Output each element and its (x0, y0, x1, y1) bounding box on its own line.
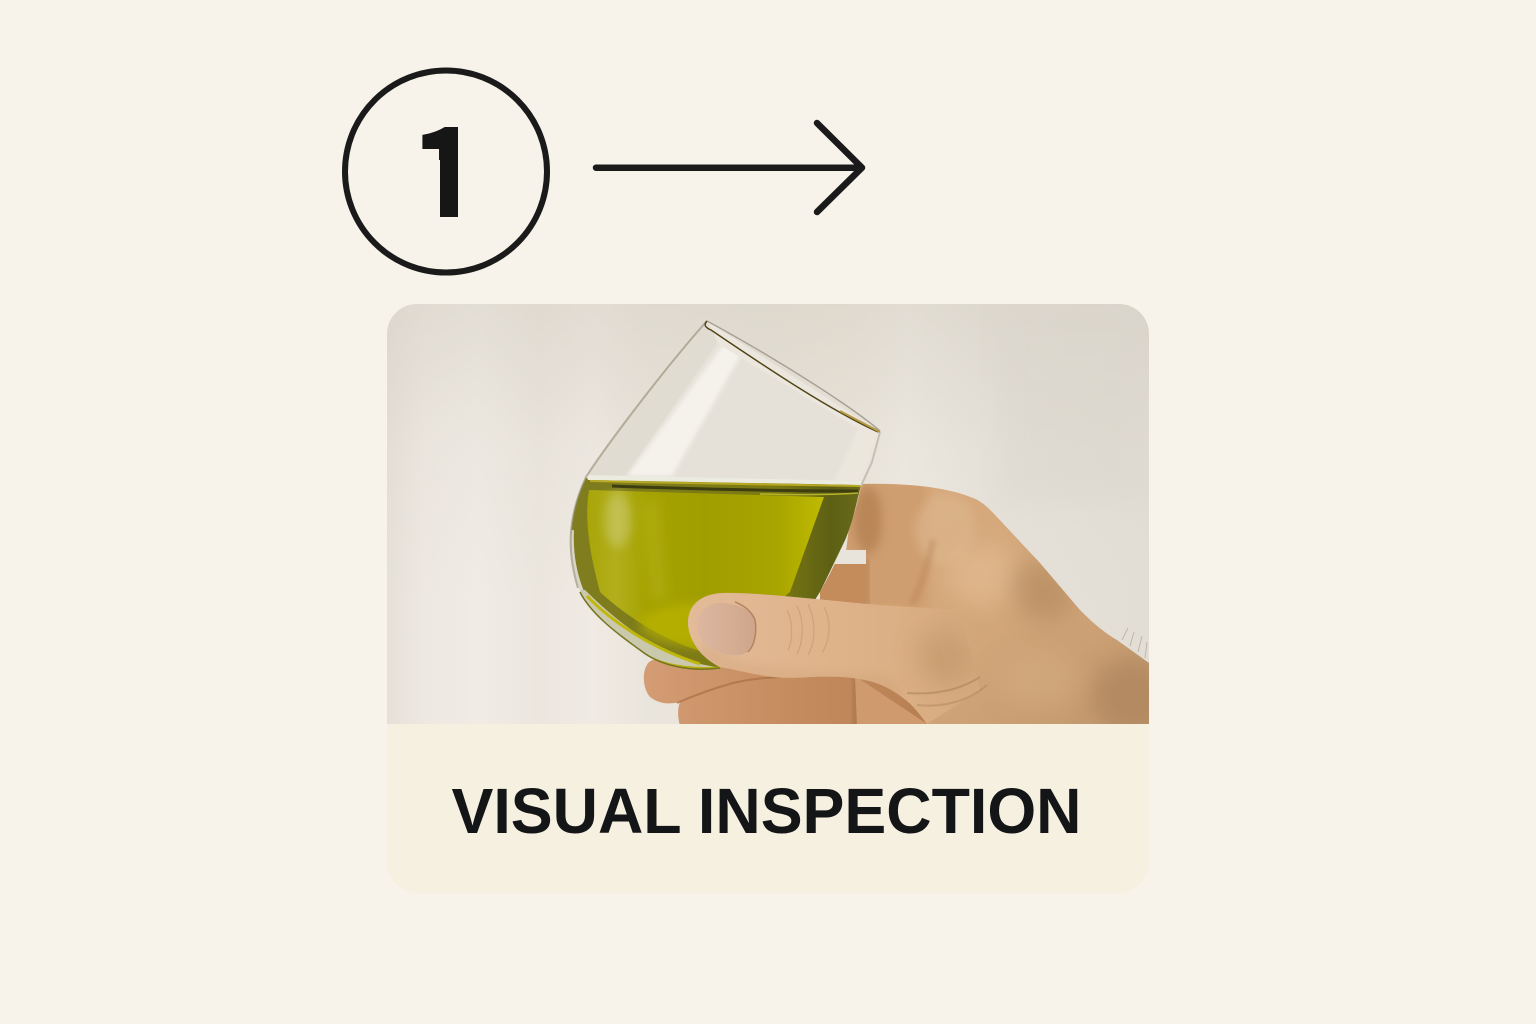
glass body (655, 487, 861, 668)
arrow (596, 123, 862, 212)
glass base wall (578, 590, 720, 669)
glass (571, 321, 880, 669)
back fingers (644, 660, 927, 724)
background gap between fingers (844, 550, 866, 564)
step number badge: 1 (411, 75, 483, 253)
thumbnail (697, 603, 756, 655)
oil: dark outer layer (571, 478, 861, 668)
panel: visual inspection card (387, 304, 1168, 893)
step number badge (345, 70, 547, 272)
photo: hand holding tilted glass of olive oil (387, 304, 1168, 733)
glass wall reflections (586, 321, 717, 480)
knuckle wrinkles (787, 604, 829, 655)
caption text: VISUAL INSPECTION (452, 775, 1082, 847)
lower finger behind glass (820, 564, 866, 606)
caption band (387, 724, 1149, 893)
oil: bright centre (587, 490, 824, 655)
photo backdrop (387, 304, 1149, 724)
glass rim (707, 321, 880, 431)
hand creases and wrist hair (907, 628, 1147, 706)
left glass wall highlight (571, 530, 581, 592)
oil surface lines (586, 475, 862, 485)
hand back (846, 484, 1149, 724)
thumb (688, 592, 962, 724)
glass outline (571, 321, 707, 588)
